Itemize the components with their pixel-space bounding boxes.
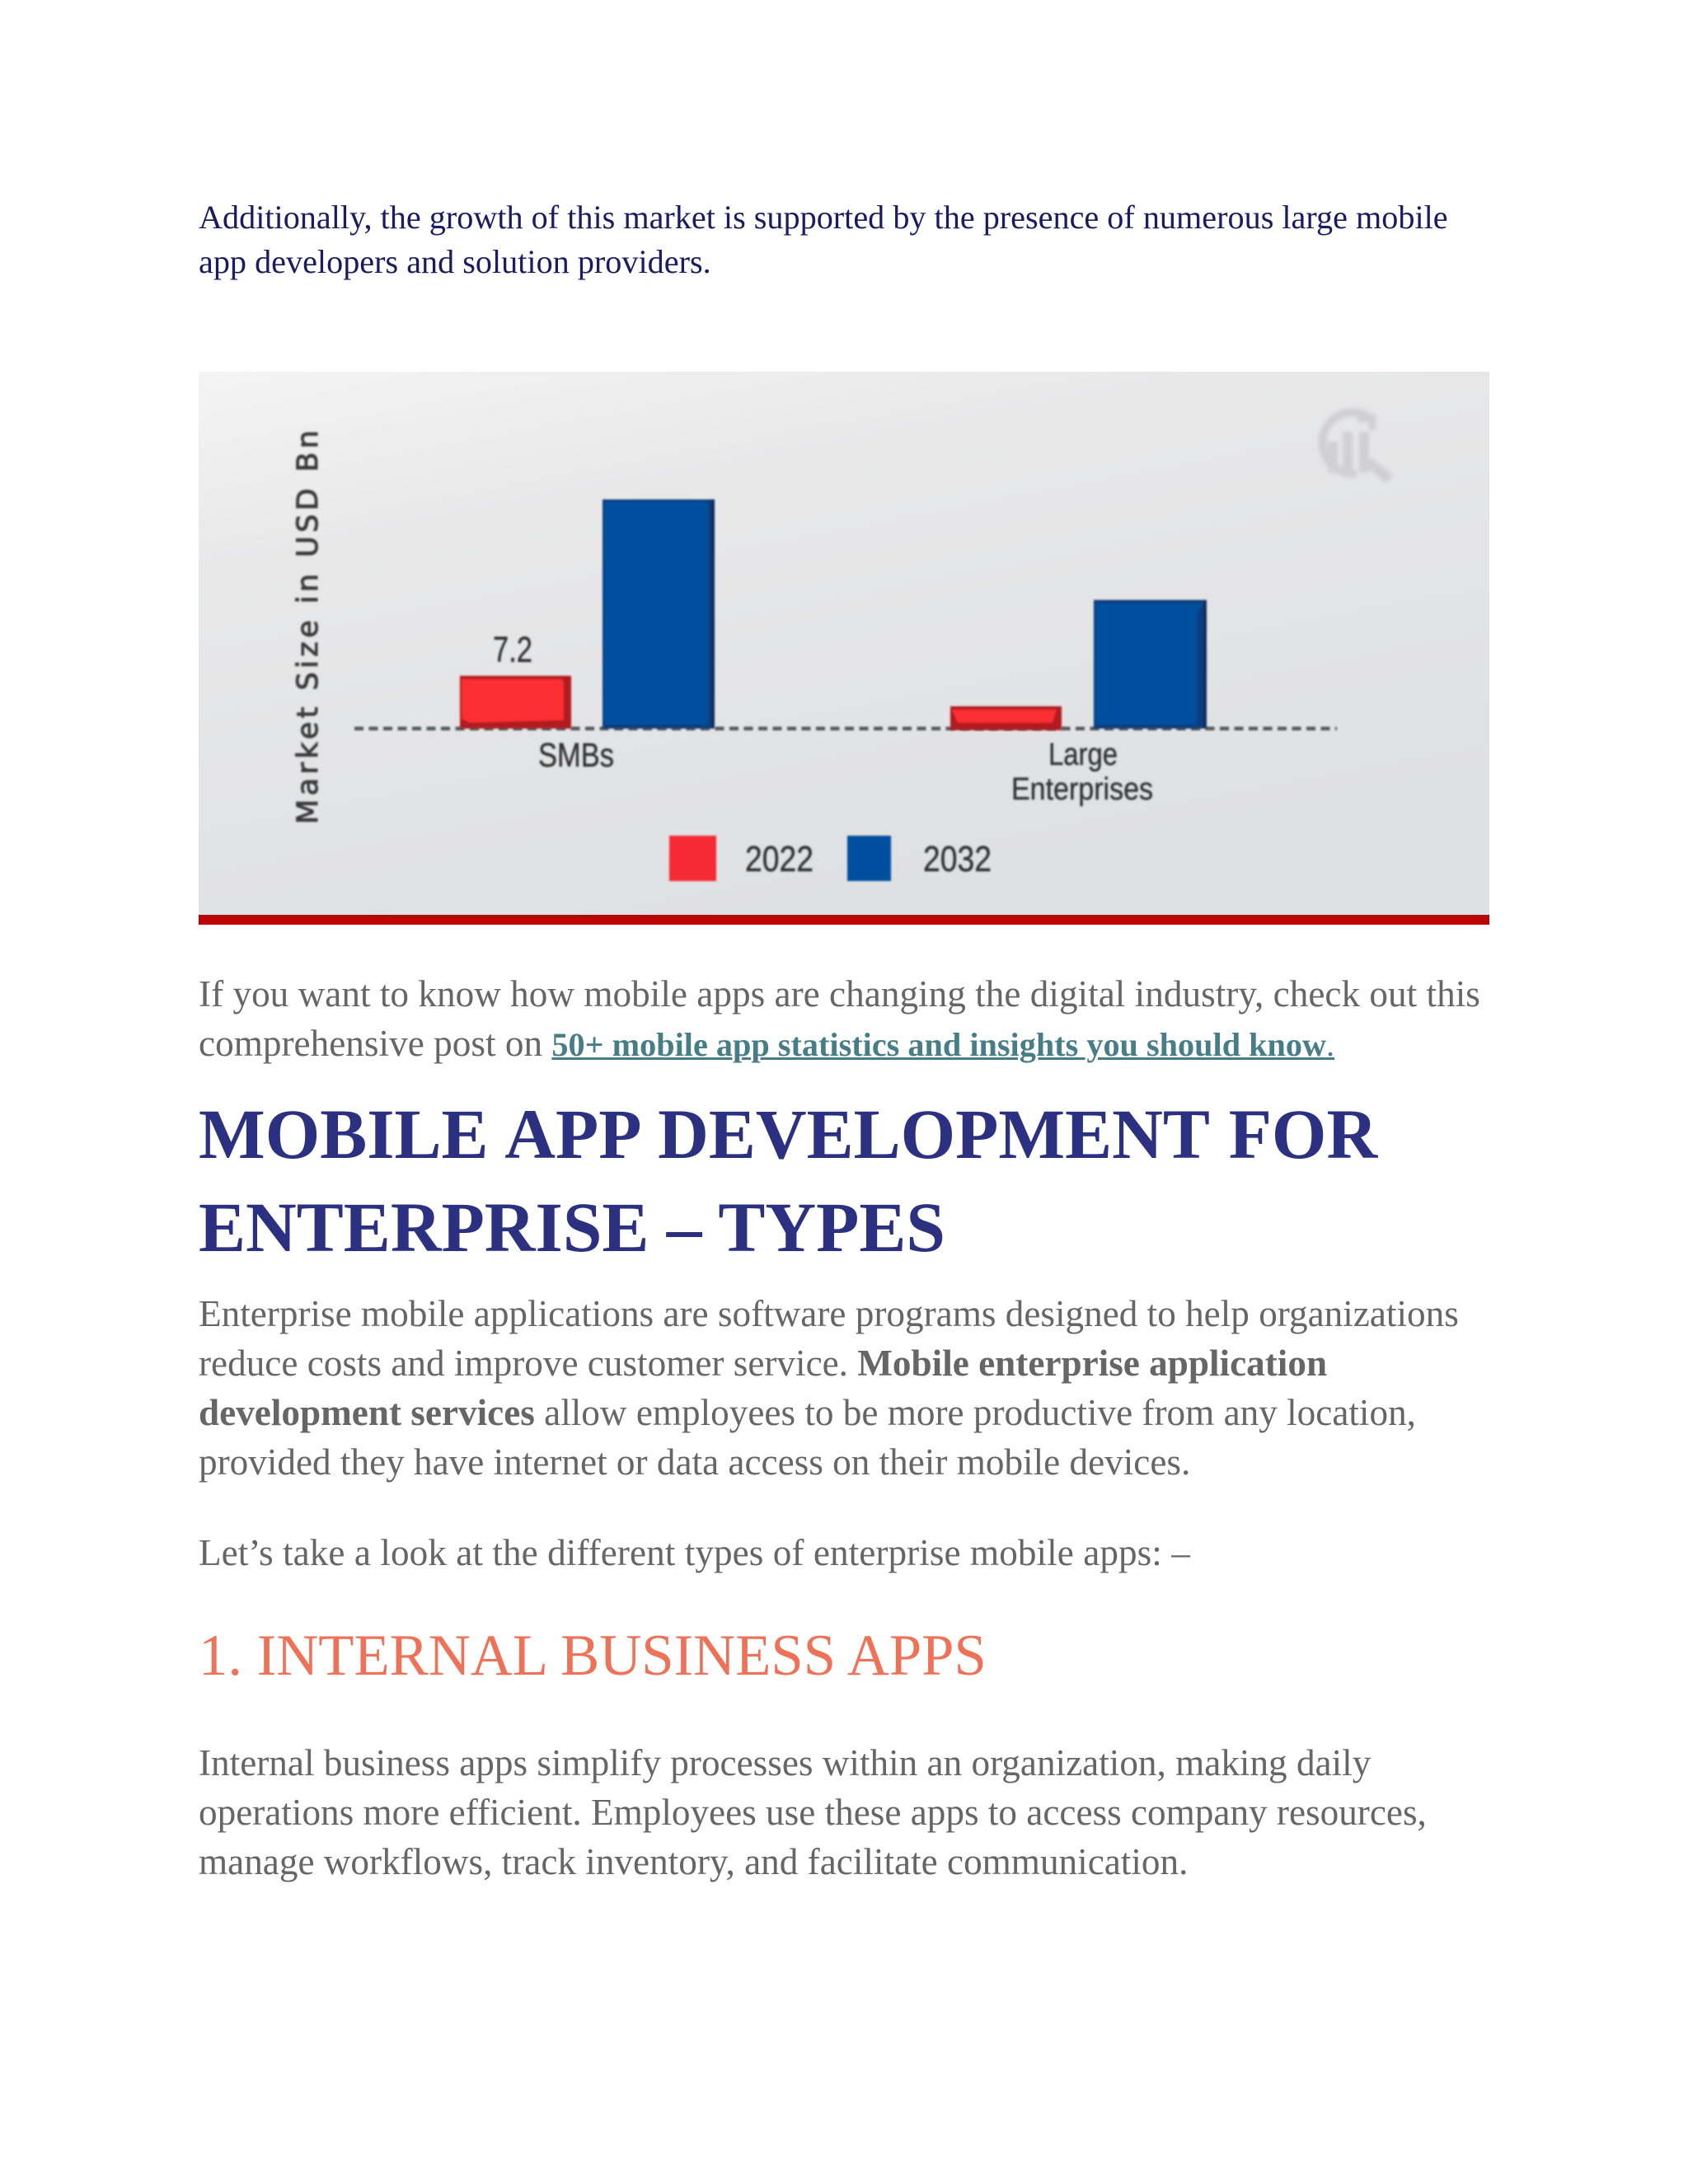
legend: 2032 bbox=[923, 839, 992, 879]
watermark logo bbox=[1322, 412, 1390, 480]
Large Enterprises 2032 bar bbox=[1094, 600, 1207, 729]
SMBs label: SMBs bbox=[538, 736, 614, 774]
legend: 2022 bbox=[745, 839, 814, 879]
intro paragraph: Additionally, the growth of this market is supported by the presence of numerous large mobile bbox=[199, 199, 1448, 236]
enterprise apps paragraph: provided they have internet or data access on their mobile devices. bbox=[199, 1441, 1190, 1483]
paragraph with link: comprehensive post on 50+ mobile app statistics and insights you should know. bbox=[199, 1023, 1334, 1064]
internal apps paragraph: operations more efficient. Employees use these apps to access company resources, bbox=[199, 1792, 1427, 1833]
enterprise apps paragraph bbox=[199, 1293, 1459, 1483]
Large Enterprises 2022 bar bbox=[950, 706, 1062, 730]
y-axis label: Market Size in USD Bn bbox=[292, 430, 325, 824]
bar chart: market size bbox=[199, 372, 1489, 925]
main heading: MOBILE APP DEVELOPMENT FOR bbox=[199, 1096, 1377, 1174]
legend bbox=[669, 836, 992, 881]
main heading: ENTERPRISE – TYPES bbox=[199, 1189, 945, 1267]
paragraph with link: If you want to know how mobile apps are changing the digital industry, check out this bbox=[199, 973, 1480, 1015]
paragraph with link bbox=[199, 973, 1480, 1064]
internal apps paragraph: Internal business apps simplify processes within an organization, making daily bbox=[199, 1742, 1371, 1783]
red base line bbox=[199, 915, 1489, 925]
lead-in sentence: Let’s take a look at the different types of enterprise mobile apps: – bbox=[199, 1532, 1190, 1573]
Large Enterprises label: Enterprises bbox=[1011, 772, 1153, 807]
main heading bbox=[199, 1096, 1378, 1267]
intro paragraph bbox=[199, 199, 1448, 280]
value label: 7.2 bbox=[493, 630, 532, 670]
internal apps paragraph bbox=[199, 1742, 1427, 1882]
intro paragraph: app developers and solution providers. bbox=[199, 243, 711, 280]
SMBs 2032 bar bbox=[603, 499, 715, 729]
SMBs 2022 bar bbox=[460, 676, 571, 729]
internal apps paragraph: manage workflows, track inventory, and facilitate communication. bbox=[199, 1841, 1188, 1882]
section heading: 1. INTERNAL BUSINESS APPS bbox=[199, 1624, 987, 1688]
enterprise apps paragraph: reduce costs and improve customer service. Mobile enterprise application bbox=[199, 1343, 1327, 1384]
Large Enterprises label: Large bbox=[1048, 738, 1118, 772]
Large Enterprises label bbox=[1011, 738, 1153, 807]
enterprise apps paragraph: development services allow employees to be more productive from any location, bbox=[199, 1392, 1416, 1433]
enterprise apps paragraph: Enterprise mobile applications are software programs designed to help organizations bbox=[199, 1293, 1459, 1334]
baseline dashed bbox=[354, 727, 1337, 730]
